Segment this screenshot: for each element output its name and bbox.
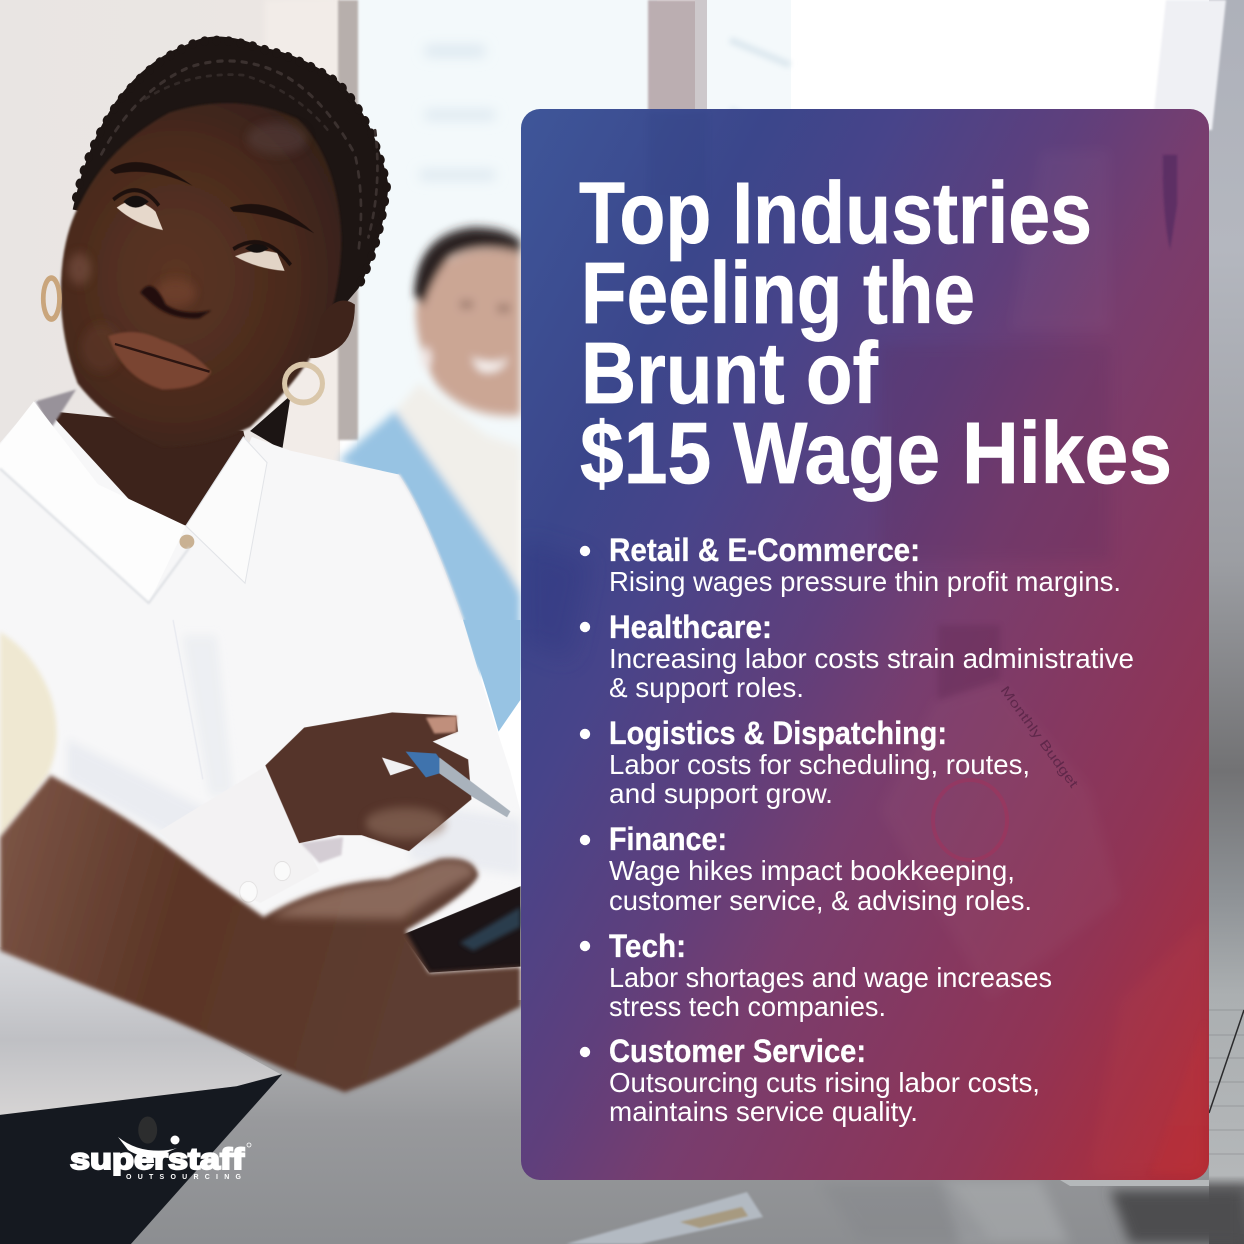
title: Feeling the bbox=[581, 245, 975, 342]
list item: customer service: Outsourcing cuts rising labor costs, bbox=[609, 1067, 1040, 1098]
list item: finance: Finance: bbox=[609, 821, 727, 857]
registered mark bbox=[247, 1143, 251, 1147]
list item: healthcare: & support roles. bbox=[609, 672, 804, 703]
tagline: OUTSOURCING bbox=[126, 1174, 242, 1181]
list item: customer service bbox=[580, 1033, 1040, 1127]
lips bbox=[108, 332, 211, 389]
panel: gradient card bbox=[521, 109, 1209, 1180]
title: $15 Wage Hikes bbox=[580, 405, 1172, 502]
braid texture bbox=[76, 40, 387, 287]
list item: finance: customer service, & advising roles. bbox=[609, 885, 1032, 916]
photo: blurred colleague in background bbox=[338, 227, 521, 672]
collar inner shadow bbox=[35, 389, 76, 429]
photo: hands, arm, phone and jeans bbox=[0, 620, 521, 1244]
photo: white shirt with collar bbox=[0, 389, 463, 620]
list item: healthcare: Increasing labor costs strain administrative bbox=[609, 643, 1134, 674]
list item: tech: Tech: bbox=[609, 928, 686, 964]
jeans bbox=[0, 1074, 282, 1244]
list item: finance: Wage hikes impact bookkeeping, bbox=[609, 855, 1015, 886]
blue cardigan bbox=[463, 620, 521, 732]
eyebrows bbox=[110, 162, 193, 186]
list item: logistics: and support grow. bbox=[609, 778, 833, 809]
faint document label: Monthly Budget bbox=[998, 683, 1082, 791]
wordmark: superstaff bbox=[70, 1143, 245, 1176]
photo: woman's head looking up bbox=[43, 36, 389, 526]
faded photo behind card bbox=[580, 154, 1200, 1082]
foreground arm bbox=[0, 775, 521, 1092]
list item: retail: Retail & E-Commerce: bbox=[609, 532, 920, 568]
list item: tech bbox=[580, 928, 1052, 1022]
collar right bbox=[186, 437, 267, 583]
neck bbox=[51, 411, 250, 526]
shirt body bbox=[0, 620, 521, 951]
title: Brunt of bbox=[581, 325, 879, 422]
logo: superstaff outsourcing bbox=[70, 1136, 251, 1181]
list item: retail bbox=[580, 532, 1121, 597]
list item: retail: Rising wages pressure thin profit margins. bbox=[609, 566, 1121, 597]
ear bbox=[309, 301, 355, 358]
desk surface bbox=[0, 1000, 1209, 1244]
list item: tech: Labor shortages and wage increases bbox=[609, 962, 1052, 993]
face bbox=[61, 103, 341, 447]
skin highlights bbox=[68, 123, 308, 372]
collar left bbox=[0, 401, 186, 603]
list item: logistics bbox=[580, 715, 1030, 809]
title bbox=[579, 165, 1172, 502]
cream sleeve bbox=[0, 632, 57, 837]
swoosh and dot icon bbox=[118, 1136, 180, 1158]
title: Top Industries bbox=[579, 165, 1092, 262]
lower shirt bbox=[0, 947, 281, 1116]
list item: healthcare: Healthcare: bbox=[609, 609, 772, 645]
earrings bbox=[43, 278, 59, 319]
list item: logistics: Labor costs for scheduling, routes, bbox=[609, 749, 1030, 780]
braid down neck bbox=[250, 395, 291, 450]
eyes bbox=[117, 202, 163, 230]
hand holding pen bbox=[265, 712, 472, 851]
cuff bbox=[159, 767, 319, 903]
list item: customer service: maintains service quality. bbox=[609, 1096, 918, 1127]
nose shadow bbox=[140, 286, 211, 318]
list item: logistics: Logistics & Dispatching: bbox=[609, 715, 947, 751]
hair bbox=[73, 36, 389, 312]
list item: tech: stress tech companies. bbox=[609, 991, 886, 1022]
phone bbox=[402, 886, 521, 973]
list item: healthcare bbox=[580, 609, 1134, 703]
list item: finance bbox=[580, 821, 1032, 916]
collar button bbox=[179, 535, 194, 549]
list item: customer service: Customer Service: bbox=[609, 1033, 866, 1069]
